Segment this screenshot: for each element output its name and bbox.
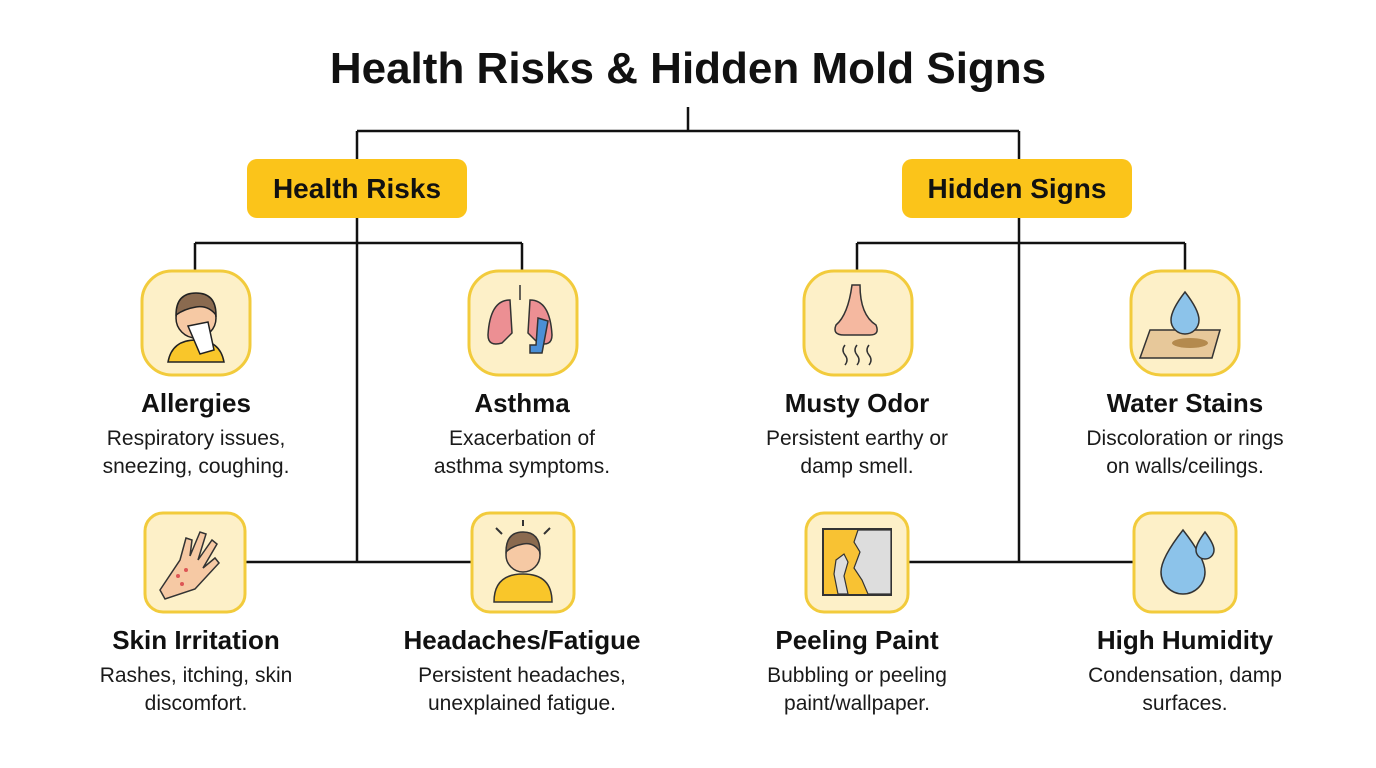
icon: nose bbox=[804, 271, 912, 375]
text: asthma: asthma symptoms. bbox=[434, 455, 610, 478]
text: musty odor: damp smell. bbox=[800, 455, 914, 478]
text: peeling paint: Bubbling or peeling bbox=[767, 664, 947, 687]
text: peeling paint: paint/wallpaper. bbox=[784, 692, 930, 715]
heading: Hidden Signs: Hidden Signs bbox=[928, 173, 1106, 204]
text: headaches: Headaches/Fatigue bbox=[404, 625, 640, 655]
heading: Health Risks: Health Risks bbox=[273, 173, 441, 204]
text: water stains: Water Stains bbox=[1107, 388, 1263, 418]
text: allergies: sneezing, coughing. bbox=[103, 455, 289, 478]
icon: water stain bbox=[1131, 271, 1239, 375]
text: skin irritation: discomfort. bbox=[145, 692, 247, 715]
icon: skin bbox=[145, 513, 245, 612]
text: skin irritation: Skin Irritation bbox=[112, 625, 280, 655]
text: headaches bbox=[404, 625, 640, 715]
text: skin irritation bbox=[100, 625, 292, 715]
text: asthma bbox=[434, 388, 610, 478]
heading: Hidden Signs bbox=[902, 159, 1132, 218]
icon: asthma bbox=[469, 271, 577, 375]
text: skin irritation: Rashes, itching, skin bbox=[100, 664, 292, 687]
text: musty odor: Persistent earthy or bbox=[766, 427, 948, 450]
text: allergies: Respiratory issues, bbox=[107, 427, 285, 450]
text: asthma: Asthma bbox=[474, 388, 570, 418]
text: allergies: Allergies bbox=[141, 388, 251, 418]
text: musty odor bbox=[766, 388, 948, 478]
text: musty odor: Musty Odor bbox=[785, 388, 929, 418]
text: high humidity: Condensation, damp bbox=[1088, 664, 1282, 687]
heading: Health Risks bbox=[247, 159, 467, 218]
text: water stains: on walls/ceilings. bbox=[1106, 455, 1264, 478]
text: asthma: Exacerbation of bbox=[449, 427, 595, 450]
text: headaches: unexplained fatigue. bbox=[428, 692, 616, 715]
text: high humidity: surfaces. bbox=[1142, 692, 1228, 715]
text: high humidity: High Humidity bbox=[1097, 625, 1273, 655]
text: peeling paint: Peeling Paint bbox=[775, 625, 939, 655]
text: headaches: Persistent headaches, bbox=[418, 664, 626, 687]
text: high humidity bbox=[1088, 625, 1282, 715]
text: water stains bbox=[1086, 388, 1284, 478]
text: allergies bbox=[103, 388, 289, 478]
icon: headache bbox=[472, 513, 574, 612]
text: water stains: Discoloration or rings bbox=[1086, 427, 1284, 450]
text: peeling paint bbox=[767, 625, 947, 715]
icon: allergies bbox=[142, 271, 250, 375]
icon: peeling paint bbox=[806, 513, 908, 612]
icon: humidity bbox=[1134, 513, 1236, 612]
title: Health Risks & Hidden Mold Signs bbox=[330, 44, 1046, 93]
